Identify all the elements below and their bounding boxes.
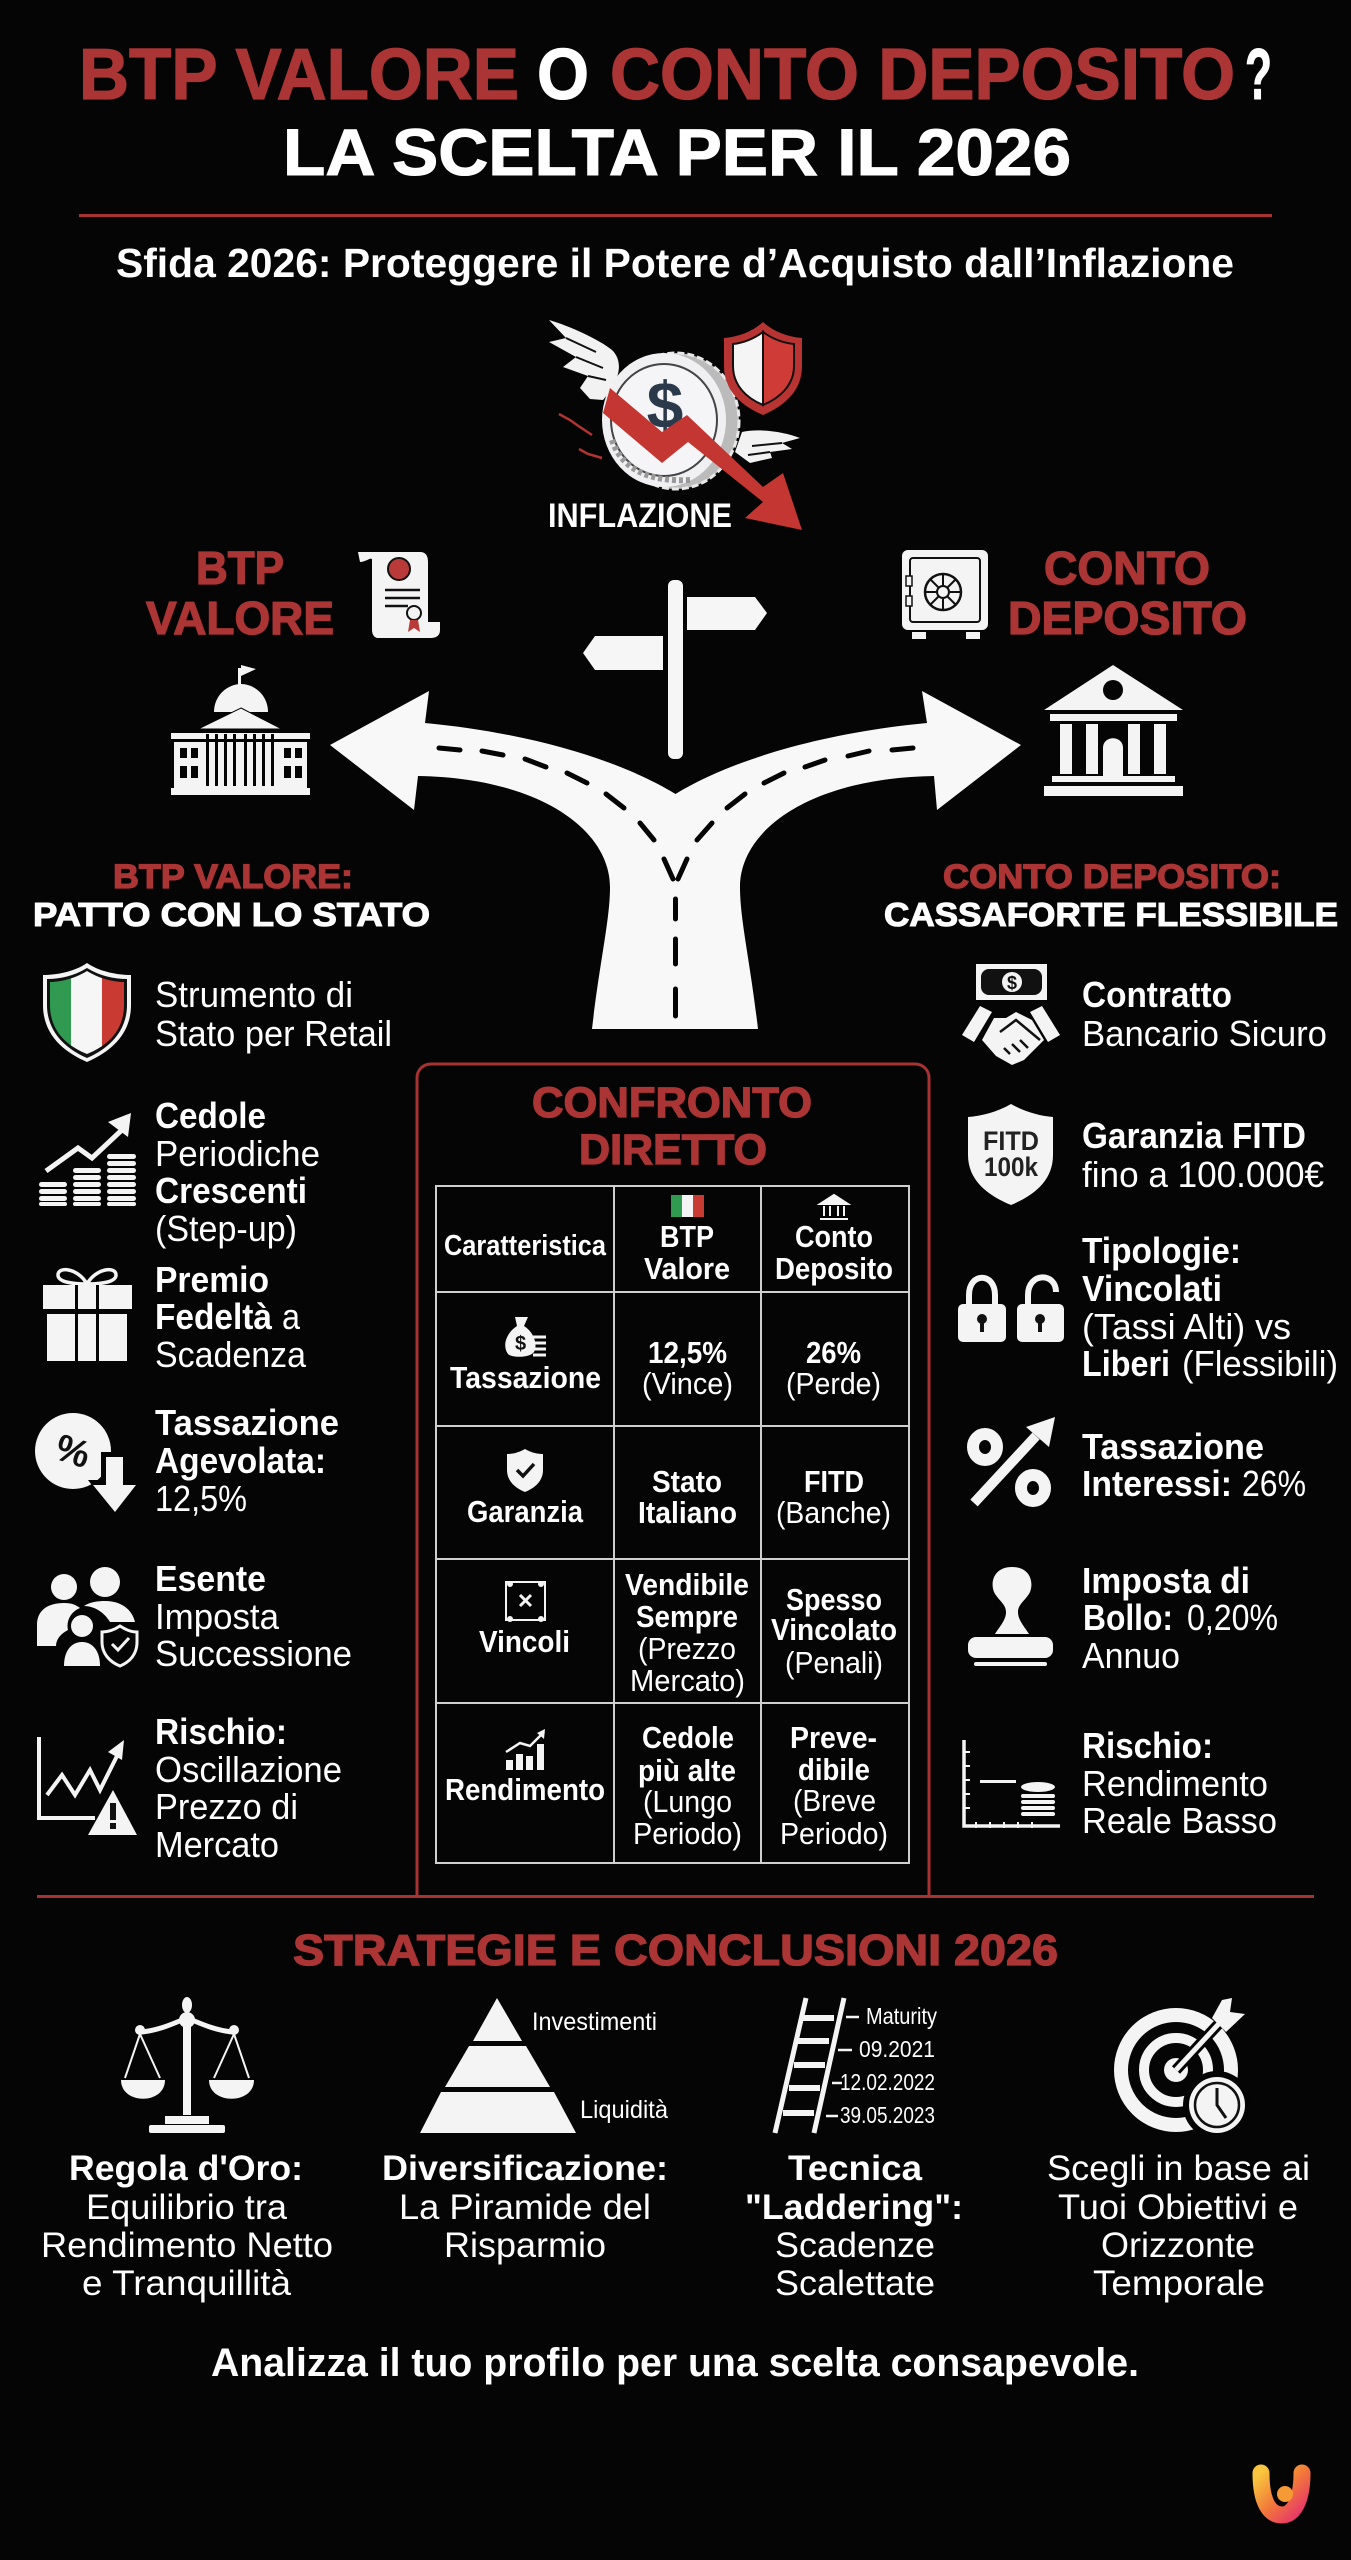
text: premio fedelta: a [282, 1296, 301, 1337]
text: garanzia FITD: Garanzia FITD [1082, 1115, 1306, 1156]
title: CONTO DEPOSITO [610, 35, 1235, 115]
icon: safe [902, 550, 988, 639]
text: tecnica laddering: Scadenze [775, 2226, 935, 2265]
table row: rendimento: (Lungo [643, 1784, 732, 1819]
text: scegli in base: Tuoi Obiettivi e [1058, 2188, 1298, 2227]
icon: percent down [35, 1413, 141, 1516]
text: tassazione interessi: Interessi: [1082, 1463, 1232, 1504]
text: scegli in base: Orizzonte [1101, 2226, 1255, 2265]
table row: vincoli: Vincoli [479, 1624, 570, 1659]
icon: stamp [968, 1567, 1053, 1666]
text: strumento di stato: Stato per Retail [155, 1013, 392, 1054]
title: ? [1245, 35, 1272, 115]
text: tassazione agevolata: 12,5% [155, 1478, 247, 1519]
text: strumento di stato: Strumento di [155, 974, 353, 1015]
text: diversificazione: Diversificazione: [382, 2149, 668, 2188]
text: regola d'oro: Rendimento Netto [41, 2226, 333, 2265]
icon: FITD shield: FITD [983, 1126, 1039, 1156]
subtitle: Sfida 2026: Proteggere il Potere d’Acquisto dall’Inflazione [116, 240, 1234, 286]
text: tassazione interessi [1082, 1426, 1306, 1504]
text: diversificazione: Risparmio [444, 2226, 606, 2265]
icon: logo [1261, 2473, 1302, 2515]
icon: signpost [583, 580, 767, 759]
heading: cassaforte flessibile: CONTO DEPOSITO: [943, 858, 1281, 896]
panel: diversificazione [382, 1998, 668, 2265]
panel: Conto Deposito column [884, 858, 1338, 1841]
table row: vincoli [479, 1567, 897, 1698]
panel: obiettivi [1047, 1998, 1310, 2303]
table row: tassazione: Tassazione [450, 1360, 601, 1395]
heading: cassaforte flessibile: CASSAFORTE FLESSIBILE [884, 896, 1338, 933]
icon: ladder with dates: Maturity [866, 2003, 937, 2029]
icon: pyramid: Liquidità [580, 2096, 668, 2124]
text: scegli in base: Temporale [1093, 2264, 1265, 2303]
icon: bank building [1044, 665, 1183, 796]
table row: rendimento: Cedole [642, 1720, 734, 1755]
icon: locks [958, 1277, 1064, 1342]
icon: flat chart with coins [964, 1740, 1060, 1828]
title: BTP VALORE [79, 35, 519, 115]
icon: growing coins [39, 1113, 136, 1206]
text: rischio rendimento: Reale Basso [1082, 1800, 1277, 1841]
icon: percent down: % [50, 1427, 95, 1477]
heading: strategie e conclusioni: STRATEGIE E CONCLUSIONI 2026 [293, 1926, 1058, 1975]
title: LA SCELTA PER IL 2026 [283, 115, 1071, 189]
icon: percent with rising arrow [973, 1417, 1055, 1503]
icon: inflazione coin with wings, shield and falling arrow: $ [647, 368, 683, 442]
text: contratto: Contratto [1082, 974, 1232, 1015]
heading: Conto Deposito: CONTO [1044, 542, 1210, 594]
text: imposta di bollo: Imposta di [1082, 1560, 1250, 1601]
table row: tassazione: $ [515, 1333, 526, 1355]
text: tassazione interessi: Tassazione [1082, 1426, 1264, 1467]
text: tipologie: Tipologie: [1082, 1230, 1241, 1271]
table row: garanzia: Italiano [638, 1495, 737, 1530]
panel: BTP Valore column [33, 858, 430, 1865]
text: regola d'oro [41, 2149, 333, 2303]
text: imposta di bollo [1082, 1560, 1278, 1676]
table row: vincoli: Vincolato [771, 1612, 897, 1647]
text: tassazione agevolata [155, 1402, 339, 1519]
text: tecnica laddering: "Laddering": [745, 2188, 963, 2227]
text: tipologie: Liberi [1082, 1343, 1170, 1384]
text: regola d'oro: Equilibrio tra [86, 2188, 288, 2227]
title: O [537, 35, 589, 115]
table row: vincoli: (Penali) [785, 1645, 883, 1680]
heading: confronto diretto: CONFRONTO [532, 1079, 812, 1127]
text: contratto: Bancario Sicuro [1082, 1013, 1327, 1054]
heading: cassaforte flessibile [884, 858, 1338, 933]
text: tipologie: Vincolati [1082, 1268, 1222, 1309]
table header [444, 1195, 893, 1286]
icon: gift [43, 1270, 132, 1361]
table row: rendimento: dibile [798, 1752, 870, 1787]
table grid [436, 1186, 909, 1863]
table header: Conto [795, 1219, 873, 1254]
text: imposta di bollo: Annuo [1082, 1635, 1180, 1676]
text: garanzia FITD [1082, 1115, 1324, 1195]
icon: ladder with dates: 12.02.2022 [840, 2069, 935, 2095]
text: cedole: (Step-up) [155, 1208, 297, 1249]
panel: regola d'oro [41, 1997, 333, 2303]
heading: patto con lo stato [33, 858, 430, 933]
heading: confronto diretto [532, 1079, 812, 1174]
text: tassazione agevolata: Tassazione [155, 1402, 339, 1443]
icon: banknote and handshake [962, 964, 1060, 1065]
icon: Italian shield [43, 963, 131, 1062]
table row: rendimento: (Breve [793, 1783, 876, 1818]
heading: BTP Valore: BTP [196, 542, 284, 594]
text: diversificazione [382, 2149, 668, 2265]
heading: confronto diretto: DIRETTO [579, 1126, 767, 1174]
text: regola d'oro: Regola d'Oro: [69, 2149, 303, 2188]
table row: vincoli: Mercato) [630, 1663, 745, 1698]
table row: tassazione: (Perde) [786, 1366, 881, 1401]
table row: tassazione: 26% [806, 1335, 861, 1370]
text: premio fedelta: Scadenza [155, 1334, 307, 1375]
heading: BTP Valore [146, 542, 334, 644]
table row: vincoli: Spesso [786, 1582, 882, 1617]
table row: garanzia: Stato [652, 1464, 722, 1499]
text: rischio oscillazione: Prezzo di [155, 1786, 298, 1827]
table header: Caratteristica [444, 1230, 607, 1262]
table row: garanzia [467, 1449, 891, 1530]
text: rischio rendimento: Rendimento [1082, 1763, 1268, 1804]
table row: vincoli: Vendibile [625, 1567, 749, 1602]
icon: scales [121, 1997, 254, 2133]
table row: rendimento: Rendimento [445, 1772, 605, 1807]
table row: rendimento [445, 1720, 888, 1851]
text: rischio oscillazione [155, 1711, 342, 1865]
text: tipologie: (Tassi Alti) vs [1082, 1306, 1291, 1347]
heading: patto con lo stato: PATTO CON LO STATO [33, 896, 430, 933]
title [79, 35, 1272, 189]
heading: Conto Deposito: DEPOSITO [1008, 592, 1247, 644]
text: tipologie: (Flessibili) [1182, 1343, 1338, 1384]
icon: pyramid [420, 1998, 668, 2133]
text: tassazione agevolata: Agevolata: [155, 1440, 326, 1481]
text: scegli in base: Scegli in base ai [1047, 2149, 1310, 2188]
table header: Deposito [775, 1251, 893, 1286]
text: strumento di stato [155, 974, 392, 1054]
text: tassazione interessi: 26% [1242, 1463, 1306, 1504]
text: premio fedelta: Premio [155, 1259, 269, 1300]
text: tecnica laddering: Tecnica [788, 2149, 923, 2188]
icon: inflazione coin with wings, shield and falling arrow [548, 320, 802, 535]
table row: garanzia: Garanzia [467, 1494, 584, 1529]
table row: rendimento: Periodo) [780, 1816, 888, 1851]
icon: ladder with dates: 39.05.2023 [840, 2102, 935, 2128]
text: garanzia FITD: fino a 100.000€ [1082, 1154, 1324, 1195]
text: tecnica laddering: Scalettate [775, 2264, 935, 2303]
icon: ladder with dates [775, 1998, 937, 2133]
text: tipologie [1082, 1230, 1338, 1384]
icon: FITD shield [968, 1104, 1053, 1205]
closing line: Analizza il tuo profilo per una scelta consapevole. [211, 2341, 1139, 2385]
text: imposta di bollo: 0,20% [1187, 1597, 1278, 1638]
heading: Conto Deposito [1008, 542, 1247, 644]
icon: FITD shield: 100k [984, 1152, 1039, 1182]
text: imposta di bollo: Bollo: [1083, 1597, 1173, 1638]
icon: target with clock [1121, 1998, 1251, 2139]
icon: inflazione coin with wings, shield and falling arrow: INFLAZIONE [548, 497, 732, 535]
text: cedole: Cedole [155, 1095, 266, 1136]
table row: vincoli: (Prezzo [638, 1631, 736, 1666]
table header: BTP [660, 1219, 714, 1254]
table row: garanzia: FITD [804, 1464, 864, 1499]
icon: banknote and handshake: $ [1007, 973, 1017, 993]
table row: tassazione: 12,5% [648, 1335, 727, 1370]
table row: tassazione: (Vince) [642, 1366, 733, 1401]
panel: confronto diretto [417, 1064, 929, 1897]
text: contratto [1082, 974, 1327, 1054]
text: tecnica laddering [745, 2149, 963, 2303]
icon: pyramid: Investimenti [532, 2008, 657, 2036]
table row: garanzia: (Banche) [776, 1495, 891, 1530]
icon: risk chart [39, 1737, 137, 1835]
text: esente: Imposta [155, 1596, 280, 1637]
text: cedole: Periodiche [155, 1133, 320, 1174]
table row: vincoli: Sempre [636, 1599, 738, 1634]
table row: tassazione [450, 1317, 881, 1401]
table row: rendimento: Preve- [790, 1720, 877, 1755]
text: rischio oscillazione: Mercato [155, 1824, 279, 1865]
icon: parliament building [171, 665, 310, 795]
text: cedole: Crescenti [155, 1170, 307, 1211]
table row: rendimento: Periodo) [633, 1816, 742, 1851]
heading: patto con lo stato: BTP VALORE: [113, 858, 353, 896]
panel: laddering [745, 1998, 963, 2303]
icon: certificate scroll [358, 552, 440, 638]
text: rischio oscillazione: Rischio: [155, 1711, 287, 1752]
text: regola d'oro: e Tranquillità [82, 2264, 292, 2303]
icon: road fork with arrows [330, 691, 1021, 1029]
text: rischio rendimento: Rischio: [1082, 1725, 1213, 1766]
text: cedole [155, 1095, 320, 1249]
table row: rendimento: più alte [638, 1753, 736, 1788]
table header: Valore [644, 1251, 730, 1286]
text: premio fedelta: Fedeltà [155, 1296, 273, 1337]
text: esente [155, 1558, 352, 1674]
heading: BTP Valore: VALORE [146, 592, 334, 644]
text: scegli in base [1047, 2149, 1310, 2303]
text: diversificazione: La Piramide del [399, 2188, 651, 2227]
text: esente: Successione [155, 1633, 352, 1674]
text: esente: Esente [155, 1558, 266, 1599]
icon: ladder with dates: 09.2021 [859, 2036, 935, 2062]
text: rischio oscillazione: Oscillazione [155, 1749, 342, 1790]
text: premio fedelta [155, 1259, 307, 1375]
icon: family with shield [37, 1567, 137, 1666]
text: rischio rendimento [1082, 1725, 1277, 1841]
